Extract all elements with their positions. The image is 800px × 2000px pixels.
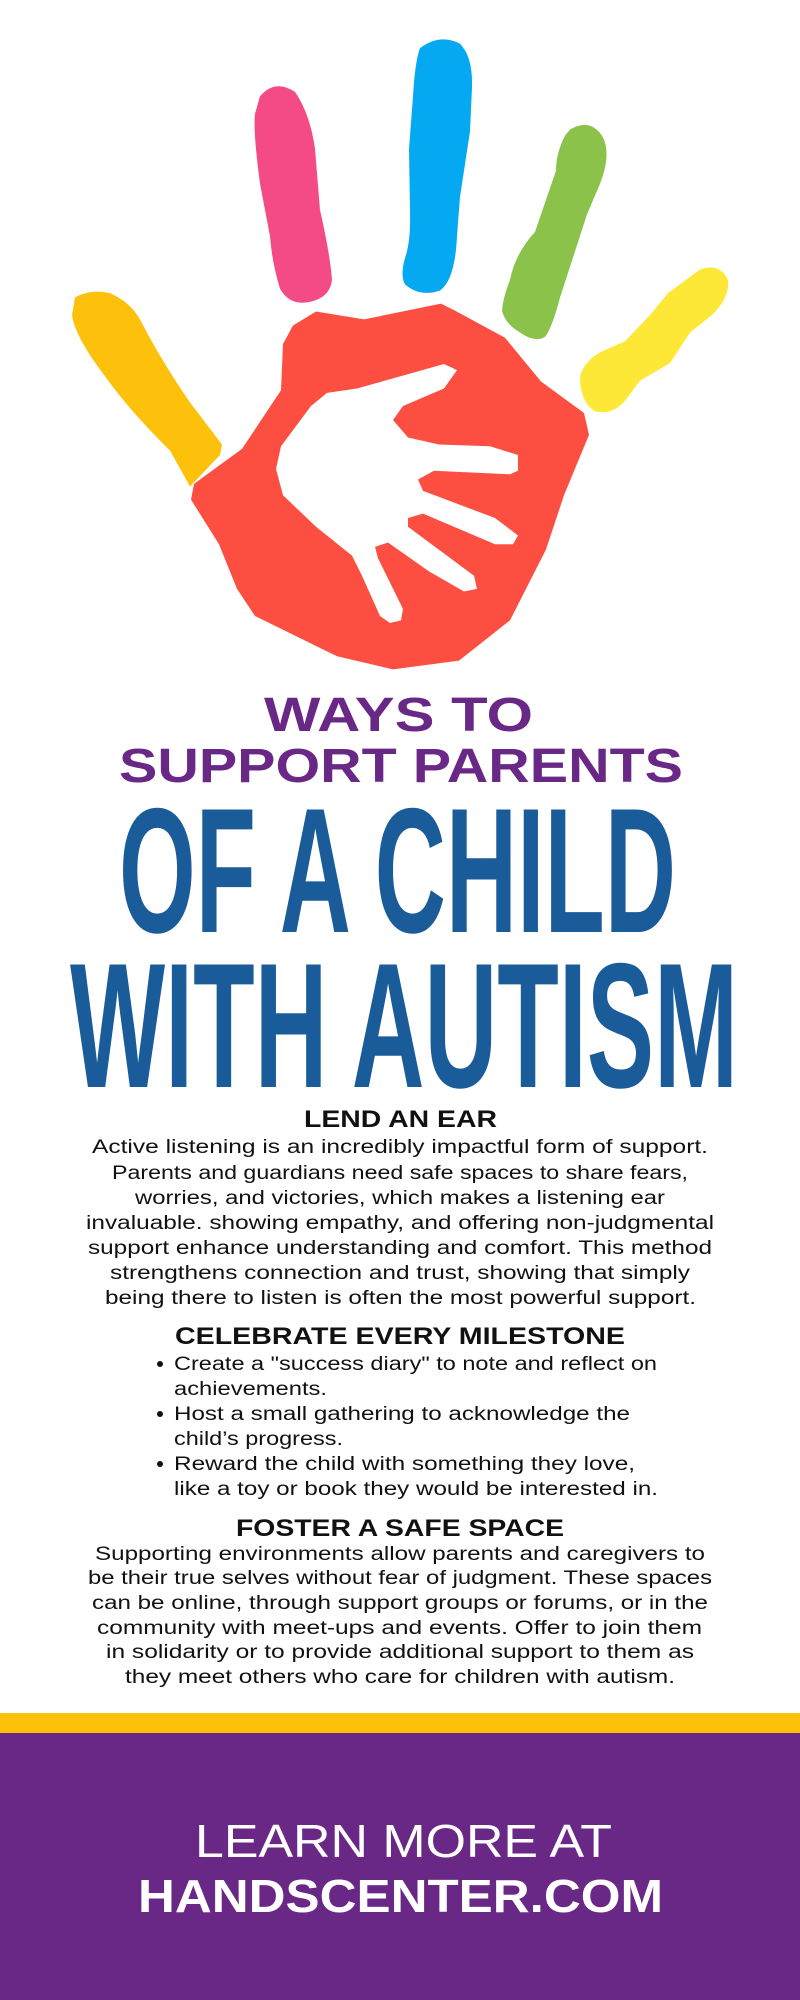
footer band [0,1713,800,2000]
list: milestones: Reward the child with something they love, [174,1454,635,1475]
text: lend an ear: support enhance understanding and comfort. This method [88,1238,712,1259]
list: milestones [157,1354,658,1500]
icon: colorful hand [72,39,728,669]
footer text: LEARN MORE AT [195,1815,612,1867]
text: lend an ear [86,1137,714,1309]
heading: lend an ear: LEND AN EAR [304,1106,497,1133]
list: milestones: child’s progress. [174,1429,343,1450]
text: foster a safe space: in solidarity or to provide additional support to them as [106,1642,694,1663]
list: milestones: Create a "success diary" to note and reflect on [174,1354,657,1375]
title: ways to support parents [119,689,683,793]
text: lend an ear: Active listening is an incredibly impactful form of support. [92,1137,708,1158]
title: ways to support parents: SUPPORT PARENTS [119,740,683,793]
title: of a child with autism [70,771,738,1125]
list: milestones: like a toy or book they would be interested in. [174,1479,658,1500]
text: foster a safe space: can be online, through support groups or forums, or in the [92,1593,708,1614]
list: milestones: achievements. [174,1379,327,1400]
text: lend an ear: Parents and guardians need safe spaces to share fears, [112,1163,688,1184]
text: foster a safe space: be their true selves without fear of judgment. These spaces [88,1568,712,1589]
footer text [138,1815,663,1922]
heading: foster a safe space: FOSTER A SAFE SPACE [236,1515,564,1542]
text: lend an ear: invaluable. showing empathy, and offering non-judgmental [86,1213,714,1234]
text: lend an ear: worries, and victories, which makes a listening ear [134,1188,666,1209]
heading: celebrate every milestone: CELEBRATE EVERY MILESTONE [175,1323,625,1350]
text: foster a safe space: they meet others who care for children with autism. [125,1667,675,1688]
text: foster a safe space [88,1544,712,1688]
list: milestones: Host a small gathering to acknowledge the [174,1404,630,1425]
text: foster a safe space: community with meet-ups and events. Offer to join them [97,1618,702,1639]
text: foster a safe space: Supporting environments allow parents and caregivers to [95,1544,705,1565]
text: lend an ear: strengthens connection and trust, showing that simply [110,1263,691,1284]
title: ways to support parents: WAYS TO [264,689,533,742]
footer text: HANDSCENTER.COM [138,1870,663,1922]
text: lend an ear: being there to listen is often the most powerful support. [105,1288,696,1309]
